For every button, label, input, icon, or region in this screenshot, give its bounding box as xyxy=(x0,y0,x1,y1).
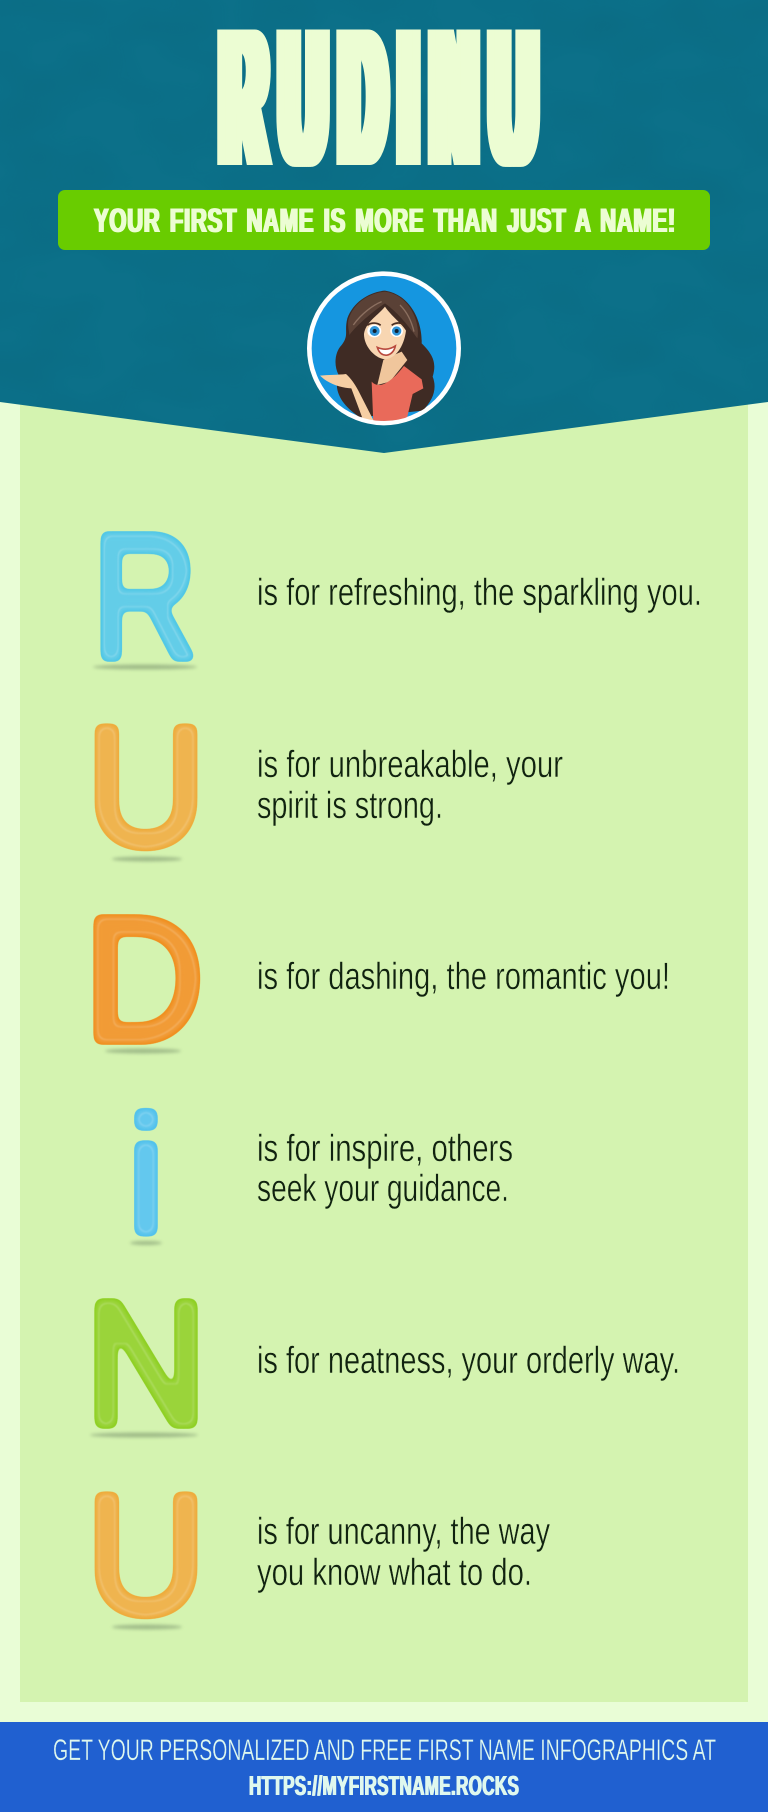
jelly letter U: U xyxy=(86,692,206,882)
line for final U xyxy=(257,1511,550,1594)
jelly letter R: R xyxy=(93,499,197,695)
jelly letter i: i xyxy=(128,1083,164,1267)
header background xyxy=(0,0,768,453)
line for final U: is for uncanny, the way xyxy=(257,1511,550,1553)
tagline: YOUR FIRST NAME IS MORE THAN JUST A NAME! xyxy=(94,202,676,240)
avatar: woman in circle xyxy=(309,274,459,423)
footer url: HTTPS://MYFIRSTNAME.ROCKS xyxy=(249,1770,519,1801)
jelly letter U: U xyxy=(86,1460,206,1650)
inner content panel xyxy=(20,380,748,1702)
line for i xyxy=(257,1128,513,1210)
line for i: seek your guidance. xyxy=(257,1168,509,1210)
footer band xyxy=(0,1722,768,1812)
line for U xyxy=(257,744,563,827)
line for i: is for inspire, others xyxy=(257,1128,513,1170)
line for U: spirit is strong. xyxy=(257,785,443,827)
line for U: is for unbreakable, your xyxy=(257,744,563,786)
jelly letter N: N xyxy=(85,1266,207,1462)
line for final U: you know what to do. xyxy=(257,1552,532,1594)
jelly letter D: D xyxy=(84,882,204,1078)
green tagline bar xyxy=(58,190,710,250)
